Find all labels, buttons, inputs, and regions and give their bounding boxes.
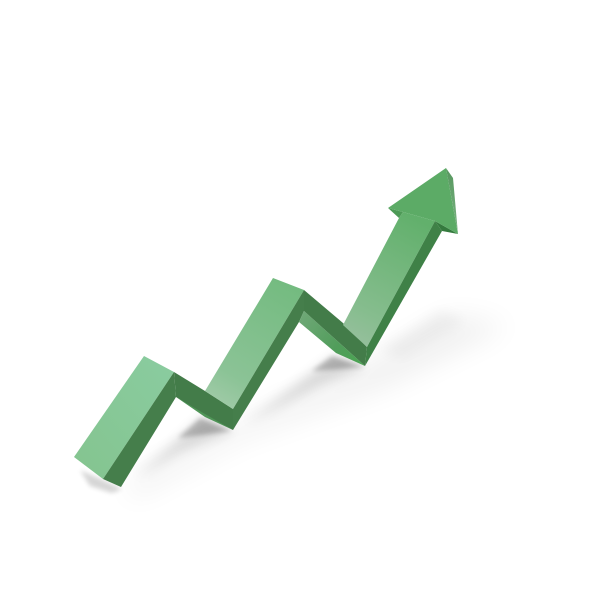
arrow segment 5: final rising shaft	[343, 212, 442, 366]
shadows on the ground	[80, 310, 510, 500]
arrow segment 4: second dip	[299, 290, 367, 366]
arrow head	[388, 168, 458, 234]
arrow segment 2: first dip	[174, 372, 233, 430]
arrow segment 1: first rising bar	[74, 356, 176, 487]
arrow segment 3: second rising bar	[205, 278, 304, 430]
